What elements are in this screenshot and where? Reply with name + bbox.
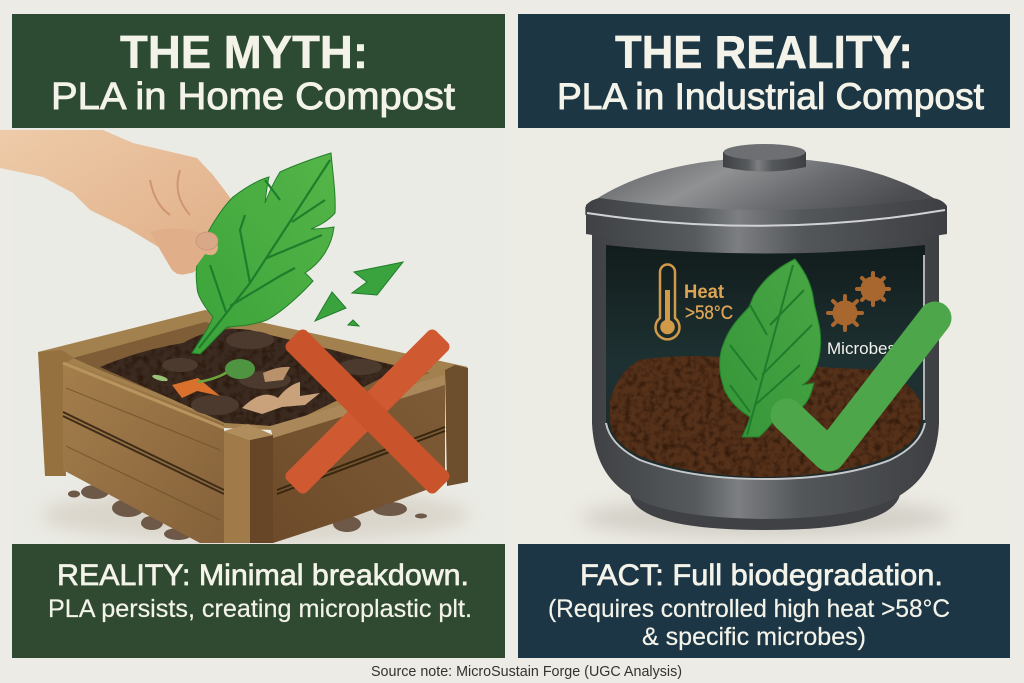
industrial composter <box>585 144 947 530</box>
header: myth <box>12 14 505 128</box>
footer panel: myth result <box>12 544 505 658</box>
result text: PLA persists, creating microplastic plt. <box>48 595 472 623</box>
label: microbes: Microbes <box>827 339 896 358</box>
plastic leaf <box>192 153 335 354</box>
title: the reality: THE REALITY: <box>615 26 913 78</box>
panel: myth illustration <box>0 128 505 544</box>
subtitle: home compost: PLA in Home Compost <box>51 76 455 118</box>
thumb <box>150 228 218 275</box>
footer panel: reality result <box>518 544 1010 658</box>
fact text: & specific microbes) <box>642 623 866 651</box>
leaf fragments <box>315 262 403 326</box>
panel: reality illustration <box>518 128 1010 544</box>
fact text <box>548 595 950 651</box>
source note: Source note: MicroSustain Forge (UGC Analysis) <box>371 663 682 680</box>
lid <box>585 144 947 250</box>
subtitle: industrial compost: PLA in Industrial Compost <box>557 76 985 117</box>
result heading: REALITY: Minimal breakdown. <box>57 559 469 592</box>
compost crate <box>38 310 468 543</box>
hand <box>0 130 232 274</box>
ground shadow and dirt <box>40 485 470 543</box>
fact heading: FACT: Full biodegradation. <box>580 559 943 592</box>
lid knob <box>723 144 806 172</box>
fact text: (Requires controlled high heat >58°C <box>548 595 950 623</box>
compost soil <box>610 356 921 477</box>
header: reality <box>518 14 1010 128</box>
vegetable scraps <box>152 359 320 414</box>
label: heat <box>684 282 733 324</box>
icon: microbes <box>828 273 889 330</box>
icon: red X <box>283 327 452 496</box>
icon: thermometer <box>656 265 680 339</box>
label: heat: >58°C <box>685 303 733 324</box>
title: the myth: THE MYTH: <box>120 26 368 78</box>
leaf in composter <box>720 259 821 437</box>
icon: green check <box>787 318 935 455</box>
label: heat: Heat <box>684 282 725 303</box>
composter shadow <box>580 498 950 538</box>
